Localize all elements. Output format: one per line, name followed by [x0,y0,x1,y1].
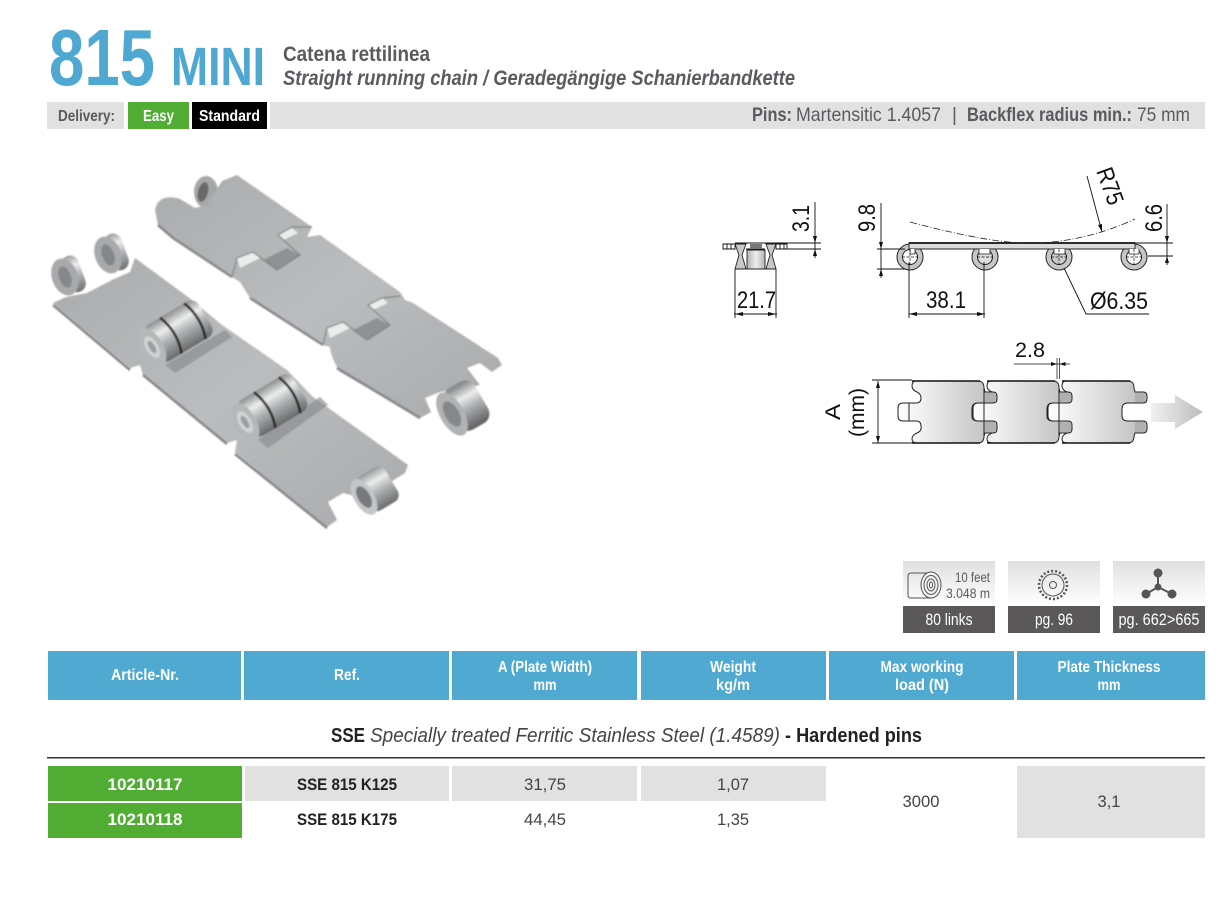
badge: Standard: Standard [199,108,260,125]
table header: A (Plate Width) [498,659,592,676]
dimension A [872,380,912,443]
technical drawing: side view: 6.6 [1141,204,1168,232]
material heading: - Hardened pins [785,725,922,747]
row 10210118: 1,35 [717,810,749,829]
table header: load (N) [895,677,949,694]
merged cell: plate thickness: 3,1 [1098,792,1120,811]
table header: Ref. [334,667,360,684]
technical drawing: top view: 2.8 [1015,339,1045,362]
technical drawing: side view: 38.1 [926,287,966,314]
pins and backflex specs: 75 mm [1137,105,1190,126]
table header: Max working [880,659,964,676]
arrow: travel direction [1151,395,1203,429]
technical drawing: end view: 21.7 [737,287,776,314]
rear plates [155,175,502,418]
roller 2 [225,371,311,446]
technical drawing: side view: R75 [1090,164,1129,209]
table header: Weight [710,659,757,676]
roller 1 [132,297,216,371]
table header: Plate Thickness [1058,659,1161,676]
merged cell: plate thickness [1017,766,1205,838]
table header: mm [1098,677,1120,694]
front plates [53,258,408,527]
icon card: packaging length: 80 links [926,610,972,629]
row 10210117: 1,07 [717,775,749,794]
material heading: SSE [331,725,365,747]
subtitle: Straight running chain / Geradegängige Schanierbandkette [283,67,795,90]
technical drawing: side view: 9.8 [854,204,881,232]
rear ear [194,176,218,208]
pin circles [897,244,1147,270]
technical drawing: end view: 3.1 [788,205,815,232]
roller shadows [165,330,328,448]
pins and backflex specs [752,105,1190,126]
technical drawing: end view [723,202,821,318]
technical drawing: side view: Ø6.35 [1090,288,1148,315]
delivery bar [47,102,1205,129]
subtitle: Catena rettilinea [283,43,430,66]
technical drawing: top view [822,339,1147,443]
front end ring [345,463,402,519]
icon card: sprocket page [1008,561,1100,633]
icon card: packaging length: 3.048 m [946,585,990,601]
icon: three-way node [1142,568,1176,598]
table rows [48,766,1205,838]
left ears [46,253,88,299]
plate stubs [910,249,1139,254]
row 10210118: SSE 815 K175 [297,810,397,829]
technical drawing: top view: A [822,404,845,420]
icon card: packaging length [903,561,995,633]
table header: mm [534,677,556,694]
delivery bar: Delivery: [58,108,115,125]
pins and backflex specs: Pins: [752,105,792,126]
rear end ring [430,376,493,441]
title: 815 MINI: 815 [49,13,155,102]
icon card: accessories page [1113,561,1205,633]
hinge tubes [263,248,390,340]
pins and backflex specs: Backflex radius min.: [967,105,1132,126]
front chain [46,231,408,528]
badge: Standard [192,102,267,129]
chain link 2 [973,381,1072,443]
dimension 2.8 [1014,358,1070,379]
icon card: accessories page: pg. 662>665 [1118,610,1200,629]
badge: Easy [128,102,189,129]
hinge notches [237,228,388,338]
icon: roll [908,572,941,598]
pin crosshairs [902,249,1142,265]
title: 815 MINI [49,13,265,102]
technical drawing: side view [854,164,1173,318]
chain link 1 [898,381,997,443]
badge: Easy: Easy [143,108,174,125]
material heading: Specially treated Ferritic Stainless Steel (1.4589) [370,725,780,747]
row 10210117: SSE 815 K125 [297,775,397,794]
row 10210118: 10210118 [108,810,182,829]
merged cell: max working load: 3000 [902,792,940,811]
icon card: packaging length: 10 feet [955,569,990,585]
row 10210118 [48,803,749,838]
rear chain [155,175,502,441]
row 10210118: 44,45 [524,810,566,829]
pins and backflex specs: | [952,105,957,126]
row 10210117 [48,766,826,801]
title: 815 MINI: MINI [171,37,265,97]
table header: Article-Nr. [111,667,179,684]
row 10210117: 10210117 [108,775,182,794]
table header [48,651,1205,700]
icon card: sprocket page: pg. 96 [1035,610,1073,629]
pins and backflex specs: Martensitic 1.4057 [796,105,941,126]
table header: kg/m [716,677,750,694]
technical drawing: top view: (mm) [846,388,869,437]
product photo: steel chains [46,175,502,528]
chain link 3 [1048,381,1147,443]
subtitle [283,43,795,90]
icon: sprocket [1039,571,1067,599]
row 10210117: 31,75 [524,775,566,794]
